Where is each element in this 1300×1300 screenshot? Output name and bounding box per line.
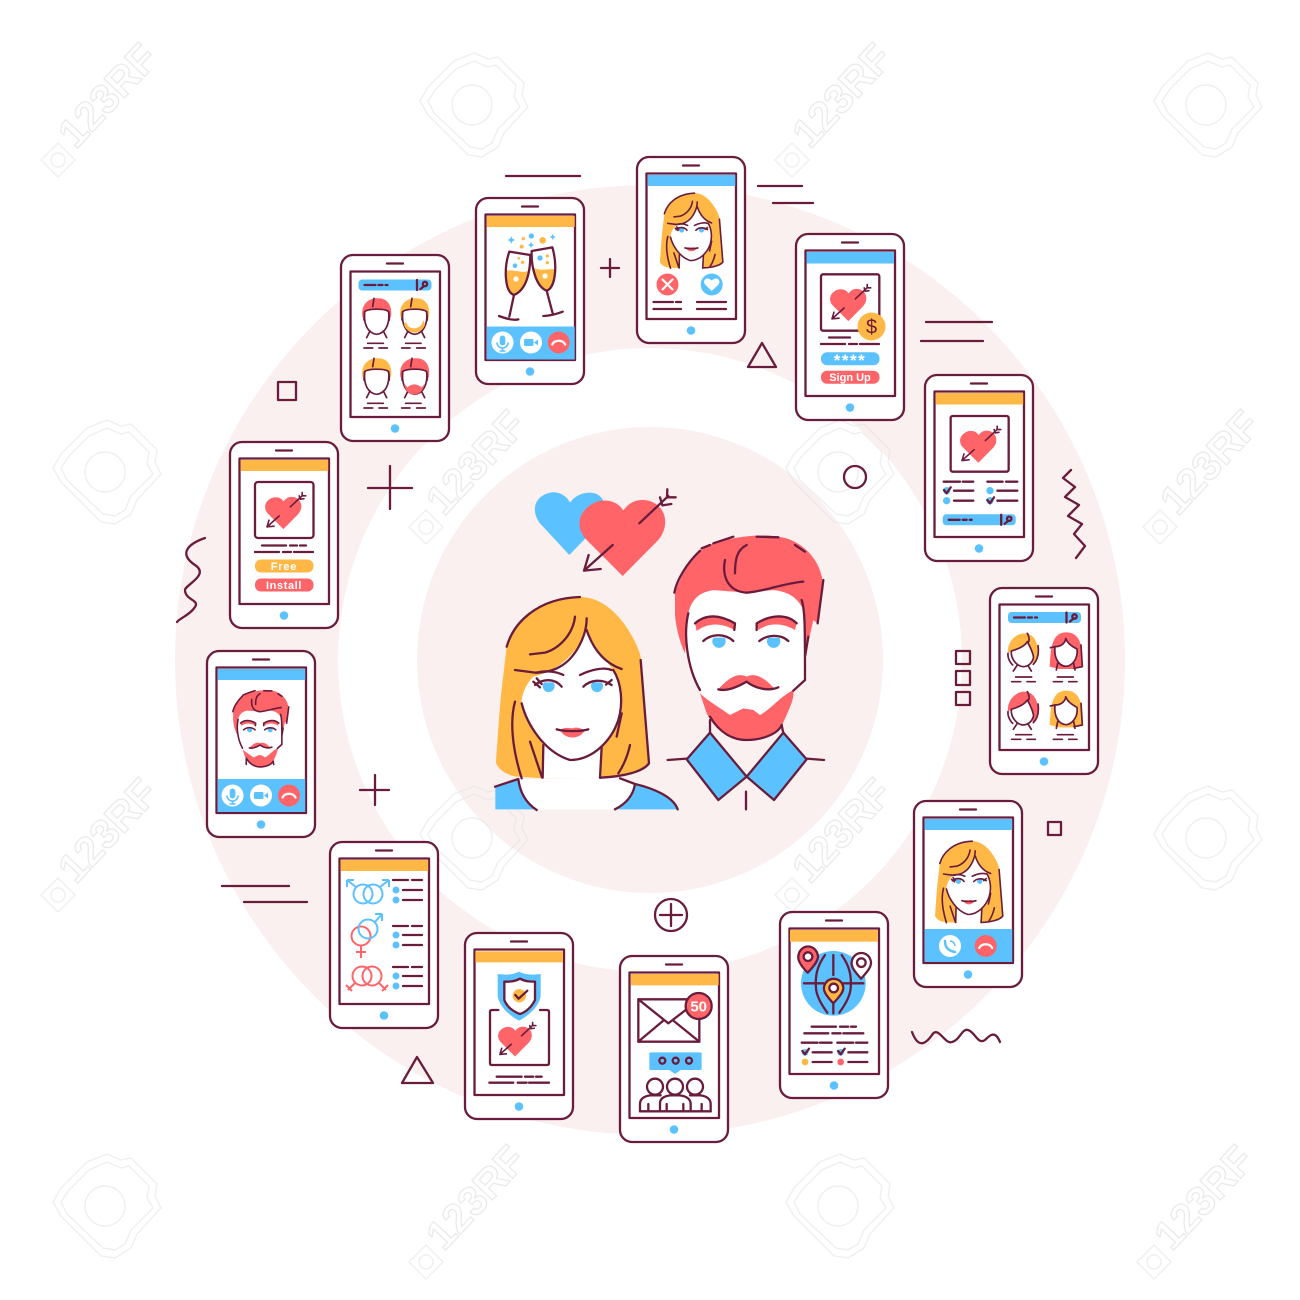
phone: app details	[925, 375, 1033, 561]
search bar	[943, 514, 1016, 525]
button: reject	[656, 274, 678, 296]
icon: red heart with arrow	[579, 489, 676, 576]
preference lists	[392, 880, 422, 990]
phone: women search	[990, 588, 1098, 774]
phone: champagne video call	[476, 198, 584, 384]
phone: sign up	[796, 234, 904, 420]
icon: shield	[498, 972, 541, 1021]
phone: men search	[341, 255, 449, 441]
icon: globe with pins	[798, 946, 871, 1016]
install button: Install	[266, 580, 302, 592]
password field: ****	[834, 351, 866, 370]
man heads grid	[362, 298, 429, 408]
speech bubble	[649, 1052, 702, 1074]
details list	[802, 1027, 867, 1065]
check list	[943, 482, 1017, 504]
icon: heart with arrow	[265, 492, 306, 529]
centre disc	[417, 427, 883, 893]
portrait: woman	[935, 841, 1003, 923]
phone: free install	[230, 442, 338, 628]
icon: dollar coin	[858, 312, 886, 340]
icon: dollar coin: $	[866, 316, 877, 338]
icon: female female	[346, 966, 388, 991]
password field	[821, 351, 880, 370]
phone: gender preferences	[330, 842, 438, 1028]
badge: 50: 50	[690, 998, 707, 1015]
portrait: man	[233, 690, 289, 767]
man portrait	[674, 536, 823, 740]
picture frame	[255, 482, 314, 538]
icon: heart with arrow	[960, 426, 1001, 463]
centre illustration: couple and hearts	[495, 489, 824, 810]
phone: messages	[620, 956, 728, 1142]
sign up button	[821, 371, 880, 384]
phone: woman profile match	[637, 157, 745, 343]
icon: blue heart	[535, 492, 605, 555]
woman portrait	[496, 597, 649, 778]
woman shirt	[495, 778, 678, 810]
icon: male male	[347, 880, 389, 904]
portrait: woman	[660, 193, 723, 268]
button: answer	[939, 935, 961, 957]
icon: heart with arrow	[498, 1022, 536, 1057]
free button	[255, 560, 314, 573]
free button: Free	[271, 561, 297, 573]
woman heads grid	[1008, 632, 1082, 739]
phone: globe location	[780, 912, 888, 1098]
phone: safe dating shield	[465, 933, 573, 1119]
icon: heart with arrow	[830, 284, 871, 321]
icon: group of people	[640, 1079, 711, 1111]
phone: woman video call	[914, 801, 1022, 987]
picture frame	[821, 274, 879, 331]
sign up button: Sign Up	[829, 372, 871, 384]
icon: male female	[352, 914, 382, 958]
man collar	[668, 733, 824, 809]
picture frame	[490, 1010, 549, 1065]
button: hang up	[975, 935, 997, 957]
install button	[255, 578, 314, 592]
phone: man video call	[207, 651, 315, 837]
icon: envelope	[638, 999, 699, 1042]
picture frame	[951, 416, 1009, 472]
button: like	[701, 274, 723, 296]
decorative lines and shapes	[177, 176, 1085, 1083]
icon: champagne glasses	[499, 233, 563, 320]
background ring	[175, 185, 1125, 1135]
